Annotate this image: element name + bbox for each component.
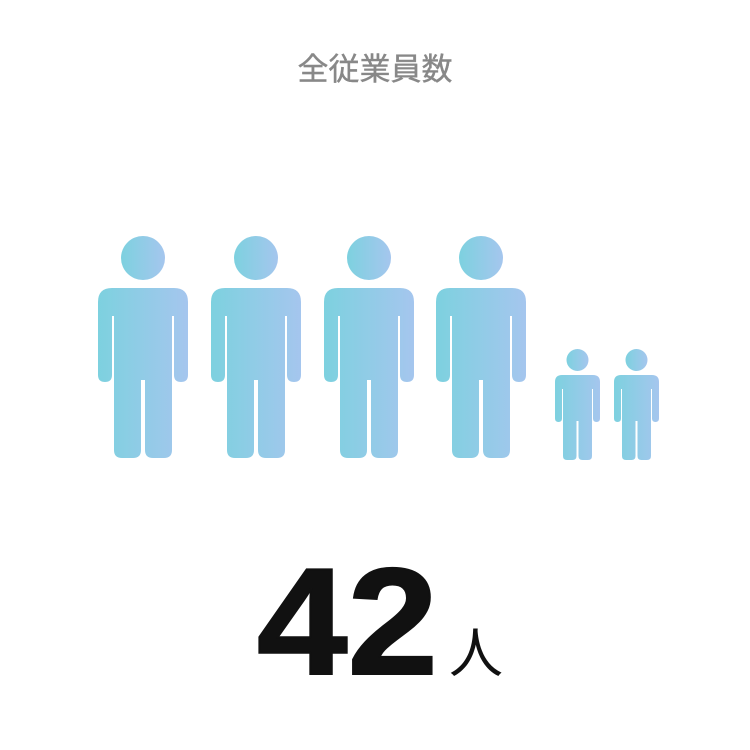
number: 42人: 42 [257, 537, 438, 707]
icon: adult 4 [436, 236, 526, 458]
icon row: employees [98, 236, 659, 460]
icon: small 2 [614, 349, 659, 460]
icon: adult 1 [98, 236, 188, 458]
number: 42人 [257, 537, 503, 707]
icon: adult 3 [324, 236, 414, 458]
icon: adult 2 [211, 236, 301, 458]
number: 42人: 人 [449, 624, 503, 684]
icon: small 1 [555, 349, 600, 460]
title: 全従業員数 [298, 52, 452, 87]
